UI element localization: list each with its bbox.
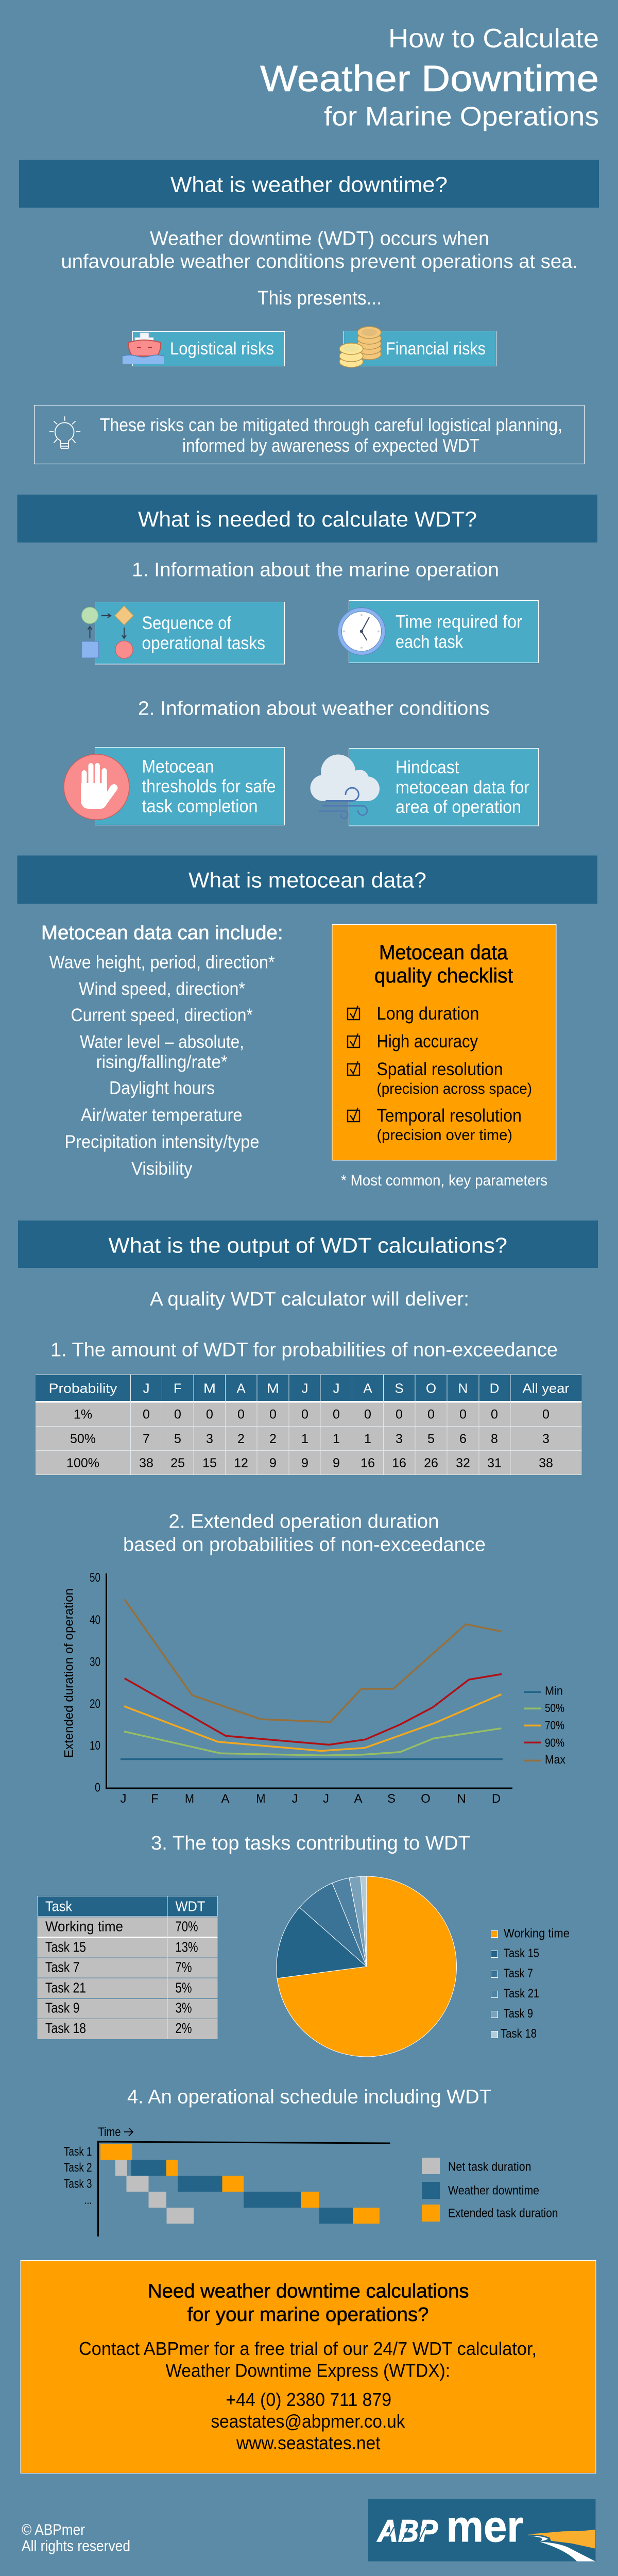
table: WDT by month and probability	[36, 1375, 582, 1475]
table: WDT by month and probability: A	[236, 1381, 246, 1396]
x axis labels: F	[151, 1792, 159, 1806]
pie chart: share of tasks	[277, 1876, 456, 2057]
table: WDT by month and probability: 1	[364, 1432, 371, 1446]
box: hindcast metocean data: Hindcast	[396, 757, 459, 777]
copyright: All rights reserved	[22, 2538, 130, 2554]
heading bar: output of WDT calculations	[18, 1221, 598, 1268]
table: WDT by month and probability: M	[267, 1381, 279, 1396]
heading bar: output of WDT calculations: What is the output of WDT calculations?	[108, 1233, 507, 1257]
table: WDT by month and probability: 8	[491, 1432, 498, 1446]
table: top tasks: 3%	[175, 2000, 192, 2015]
box: sequence of operational tasks: operational tasks	[142, 633, 265, 653]
box: metocean thresholds: thresholds for safe	[142, 776, 276, 796]
panel: metocean data quality checklist	[332, 924, 556, 1160]
text: a quality WDT calculator will deliver: A quality WDT calculator will deliver:	[150, 1289, 469, 1310]
title: for Marine Operations	[324, 102, 599, 132]
checkboxes	[348, 1006, 359, 1122]
callout: risk mitigation: These risks can be mitigated through careful logistical planning,	[100, 414, 562, 435]
chart legend: 50%	[545, 1701, 564, 1715]
table: WDT by month and probability: M	[203, 1381, 216, 1396]
gantt chart: operational schedule: Task 3	[64, 2177, 92, 2191]
table: WDT by month and probability: 0	[237, 1408, 245, 1422]
table: WDT by month and probability: J	[302, 1381, 308, 1396]
callout: risk mitigation: informed by awareness of expected WDT	[182, 435, 479, 456]
x axis labels: J	[323, 1792, 329, 1806]
box: metocean thresholds	[95, 747, 284, 825]
y axis labels	[90, 1571, 100, 1795]
text block: metocean data can include: Air/water temperature	[81, 1105, 242, 1125]
section: what is metocean data	[18, 855, 597, 1189]
text block: metocean data can include: Wave height, period, direction*	[49, 952, 275, 973]
copyright: © ABPmer	[22, 2521, 85, 2538]
subheading: amount of WDT: 1. The amount of WDT for probabilities of non-exceedance	[50, 1340, 558, 1361]
gantt chart: operational schedule: Task 2	[64, 2161, 92, 2175]
gantt chart: operational schedule: ...	[84, 2193, 92, 2207]
table: top tasks: Task 18	[45, 2020, 86, 2036]
y axis labels: 0	[95, 1781, 100, 1795]
icon: stop hand	[64, 754, 129, 820]
y axis labels: 10	[90, 1739, 100, 1753]
gantt chart: operational schedule	[64, 2125, 390, 2236]
box: hindcast metocean data: metocean data for	[396, 777, 529, 798]
table: top tasks	[37, 1896, 217, 2039]
call to action panel	[21, 2261, 596, 2473]
table: WDT by month and probability: 0	[364, 1408, 371, 1422]
table: WDT by month and probability: 0	[333, 1408, 340, 1422]
table: WDT by month and probability: 38	[139, 1456, 153, 1470]
table: WDT by month and probability: 3	[206, 1432, 213, 1446]
gantt legend: Weather downtime	[448, 2183, 539, 2198]
CTA heading: Need weather downtime calculations	[148, 2280, 469, 2302]
subheading: top tasks contributing to WDT: 3. The top tasks contributing to WDT	[151, 1833, 470, 1854]
section: output of WDT calculations	[18, 1221, 598, 2236]
CTA contact details: www.seastates.net	[236, 2432, 380, 2453]
table: WDT by month and probability: 100%	[66, 1456, 99, 1470]
text block: WDT definition: unfavourable weather conditions prevent operations at sea.	[61, 251, 578, 273]
pie legend: Task 18	[501, 2027, 537, 2041]
table: WDT by month and probability: 16	[360, 1456, 375, 1470]
table: top tasks: 5%	[175, 1979, 192, 1996]
heading bar: what is metocean data	[18, 855, 597, 904]
box: time required: each task	[396, 632, 463, 652]
table: WDT by month and probability: 31	[487, 1456, 502, 1470]
text block: metocean data can include	[41, 922, 283, 1179]
pie legend: Task 7	[504, 1967, 533, 1980]
x axis labels: A	[221, 1792, 230, 1806]
pie legend	[491, 1927, 570, 2041]
section: what is weather downtime	[19, 160, 599, 464]
table: WDT by month and probability: 3	[542, 1432, 550, 1446]
table: WDT by month and probability: 1%	[74, 1408, 92, 1422]
logo: ABP mer: mer	[446, 2502, 523, 2551]
x axis labels: M	[185, 1792, 194, 1806]
text block: metocean data can include: Visibility	[131, 1159, 193, 1179]
table: WDT by month and probability: 9	[333, 1456, 340, 1470]
table: top tasks: Working time	[45, 1919, 123, 1934]
table: WDT by month and probability: 0	[459, 1408, 467, 1422]
icon: light bulb	[49, 417, 80, 449]
x axis labels: M	[256, 1792, 266, 1806]
table: WDT by month and probability: J	[333, 1381, 340, 1396]
x axis labels	[121, 1792, 501, 1806]
table: WDT by month and probability: 38	[539, 1456, 553, 1470]
text block: metocean data can include: Precipitation intensity/type	[65, 1132, 260, 1152]
icon: ship	[123, 333, 164, 364]
table: WDT by month and probability: O	[426, 1381, 436, 1396]
table: WDT by month and probability: 2	[269, 1432, 277, 1446]
x axis labels: J	[291, 1792, 298, 1806]
table: WDT by month and probability: 9	[301, 1456, 308, 1470]
table: WDT by month and probability: 7	[143, 1432, 150, 1446]
checklist items	[377, 1004, 532, 1144]
table: WDT by month and probability: 2	[237, 1432, 245, 1446]
table: top tasks: Task 7	[45, 1959, 79, 1975]
pie legend: Task 9	[504, 2007, 533, 2021]
checklist heading	[374, 941, 513, 987]
heading bar: what is needed to calculate WDT: What is needed to calculate WDT?	[138, 507, 477, 531]
CTA contact details: +44 (0) 2380 711 879	[226, 2389, 391, 2410]
chart legend: Min	[545, 1684, 563, 1697]
box: metocean thresholds: Metocean	[142, 756, 214, 777]
table: WDT by month and probability: A	[363, 1381, 372, 1396]
CTA heading: for your marine operations?	[187, 2304, 428, 2326]
text block: metocean data can include: Current speed, direction*	[71, 1005, 253, 1025]
checklist items: (precision over time)	[377, 1127, 512, 1144]
box: time required: Time required for	[396, 612, 522, 632]
title: Weather Downtime	[260, 59, 599, 99]
box: financial risks	[344, 331, 496, 366]
table: WDT by month and probability: J	[143, 1381, 149, 1396]
x axis labels: O	[421, 1792, 431, 1806]
heading bar: what is metocean data: What is metocean data?	[188, 868, 426, 892]
x axis labels: J	[121, 1792, 127, 1806]
text block: metocean data can include: Daylight hours	[109, 1078, 215, 1098]
chart legend: Max	[545, 1753, 565, 1766]
text block: WDT definition: Weather downtime (WDT) occurs when	[150, 228, 489, 249]
gantt legend	[422, 2158, 558, 2222]
table: WDT by month and probability: 32	[456, 1456, 470, 1470]
heading bar: what is weather downtime	[19, 160, 599, 208]
heading bar: what is weather downtime: What is weather downtime?	[170, 172, 448, 197]
subheading: operational schedule: 4. An operational schedule including WDT	[127, 2087, 491, 2108]
box: financial risks: Financial risks	[386, 339, 486, 359]
pie legend: Task 15	[504, 1946, 539, 1960]
table: top tasks: Task 21	[45, 1979, 86, 1996]
y axis labels: 40	[90, 1613, 100, 1627]
table: WDT by month and probability: N	[458, 1381, 468, 1396]
box: sequence of operational tasks	[95, 602, 284, 664]
y axis labels: 50	[90, 1571, 100, 1585]
table: WDT by month and probability: 0	[396, 1408, 403, 1422]
subheading: extended operation duration: based on probabilities of non-exceedance	[123, 1534, 486, 1556]
box: hindcast metocean data	[349, 748, 539, 826]
subheading: information about weather conditions: 2. Information about weather conditions	[138, 698, 490, 719]
subheading: extended operation duration: 2. Extended operation duration	[169, 1511, 439, 1532]
chart legend: 90%	[545, 1736, 564, 1750]
table: WDT by month and probability: 15	[202, 1456, 217, 1470]
table: WDT by month and probability: Probability	[48, 1381, 117, 1396]
copyright	[22, 2521, 130, 2554]
table: WDT by month and probability: 0	[427, 1408, 435, 1422]
icon: cloud and wind	[310, 754, 380, 818]
x axis labels: D	[492, 1792, 501, 1806]
table: top tasks: 70%	[175, 1919, 198, 1934]
pie legend: Task 21	[504, 1987, 539, 2001]
checklist items: Temporal resolution	[377, 1106, 522, 1126]
text block: WDT definition	[61, 228, 578, 273]
series lines	[121, 1599, 503, 1759]
CTA heading	[148, 2280, 469, 2326]
table: WDT by month and probability: 25	[170, 1456, 185, 1470]
x axis labels: S	[387, 1792, 396, 1806]
table: WDT by month and probability: 0	[269, 1408, 277, 1422]
chart legend: 70%	[545, 1719, 564, 1732]
logo: ABP mer: ABP	[376, 2514, 438, 2548]
table: top tasks: Task	[45, 1898, 73, 1914]
table: WDT by month and probability: All year	[522, 1381, 570, 1396]
table: top tasks: 13%	[175, 1939, 198, 1955]
box: metocean thresholds: task completion	[142, 796, 258, 816]
checklist items: High accuracy	[377, 1031, 478, 1052]
box: time required	[349, 601, 539, 663]
text: this presents: This presents...	[258, 287, 382, 309]
y axis title: Extended duration of operation	[62, 1588, 76, 1758]
title: How to Calculate	[388, 24, 599, 54]
text block: metocean data can include: Wind speed, direction*	[79, 979, 245, 999]
box: sequence of operational tasks: Sequence of	[142, 613, 231, 633]
table: WDT by month and probability: S	[394, 1381, 404, 1396]
icon: coins	[339, 327, 381, 367]
table: WDT by month and probability: 12	[234, 1456, 248, 1470]
table: WDT by month and probability: 3	[396, 1432, 403, 1446]
table: WDT by month and probability: 50%	[70, 1432, 96, 1446]
subheading: extended operation duration	[123, 1511, 486, 1556]
table: WDT by month and probability: D	[490, 1381, 499, 1396]
logo: ABP mer	[368, 2499, 595, 2562]
CTA contact details: seastates@abpmer.co.uk	[211, 2411, 405, 2432]
table: WDT by month and probability: 9	[269, 1456, 277, 1470]
pie legend: Working time	[504, 1927, 570, 1940]
table: top tasks: Task 15	[45, 1939, 86, 1955]
icon: clock	[338, 608, 385, 655]
table: WDT by month and probability: 0	[206, 1408, 213, 1422]
table: WDT by month and probability: 0	[542, 1408, 550, 1422]
box: hindcast metocean data: area of operation	[396, 797, 521, 817]
heading bar: what is needed to calculate WDT	[18, 495, 597, 543]
table: WDT by month and probability: 16	[392, 1456, 406, 1470]
CTA contact details	[211, 2389, 405, 2453]
line chart: extended duration of operation	[62, 1571, 565, 1806]
gantt legend: Extended task duration	[448, 2206, 558, 2221]
table: WDT by month and probability: 1	[301, 1432, 308, 1446]
icon: flow chart	[81, 606, 133, 658]
table: top tasks: 2%	[175, 2020, 192, 2036]
table: WDT by month and probability: 5	[427, 1432, 435, 1446]
table: WDT by month and probability: 26	[424, 1456, 438, 1470]
y axis labels: 20	[90, 1697, 100, 1711]
table: top tasks: WDT	[175, 1898, 205, 1914]
checklist heading: quality checklist	[374, 964, 513, 987]
table: WDT by month and probability: 5	[174, 1432, 181, 1446]
checklist heading: Metocean data	[379, 941, 508, 964]
box: logistical risks	[133, 332, 284, 366]
checklist items: Spatial resolution	[377, 1059, 503, 1079]
callout: risk mitigation	[34, 405, 584, 464]
section: what is needed	[18, 495, 597, 826]
table: top tasks: 7%	[175, 1959, 192, 1975]
table: WDT by month and probability: 0	[143, 1408, 150, 1422]
CTA body	[79, 2338, 537, 2381]
table: WDT by month and probability: 6	[459, 1432, 467, 1446]
table: WDT by month and probability: 0	[301, 1408, 308, 1422]
table: WDT by month and probability: 1	[333, 1432, 340, 1446]
text block: metocean data can include: rising/falling/rate*	[96, 1052, 228, 1072]
table: WDT by month and probability: 0	[174, 1408, 181, 1422]
footnote: key parameters: * Most common, key parameters	[341, 1172, 547, 1189]
chart legend	[524, 1684, 565, 1766]
checklist items: (precision across space)	[377, 1080, 532, 1097]
gantt chart: operational schedule: Task 1	[64, 2145, 92, 2159]
y axis labels: 30	[90, 1655, 100, 1669]
table: top tasks: Task 9	[45, 2000, 79, 2015]
x axis labels: N	[457, 1792, 466, 1806]
text block: metocean data can include: Metocean data can include:	[41, 922, 283, 944]
table: WDT by month and probability: F	[174, 1381, 182, 1396]
text block: metocean data can include: Water level – absolute,	[80, 1032, 244, 1052]
CTA body: Weather Downtime Express (WTDX):	[166, 2360, 450, 2381]
checklist items: Long duration	[377, 1004, 479, 1024]
gantt chart: operational schedule: Time	[98, 2125, 121, 2139]
box: logistical risks: Logistical risks	[170, 339, 274, 359]
table: WDT by month and probability: 0	[491, 1408, 498, 1422]
CTA body: Contact ABPmer for a free trial of our 24/7 WDT calculator,	[79, 2338, 537, 2359]
subheading: information about the marine operation: 1. Information about the marine operation	[132, 560, 499, 581]
x axis labels: A	[354, 1792, 363, 1806]
title	[260, 24, 599, 132]
gantt legend: Net task duration	[448, 2160, 531, 2174]
